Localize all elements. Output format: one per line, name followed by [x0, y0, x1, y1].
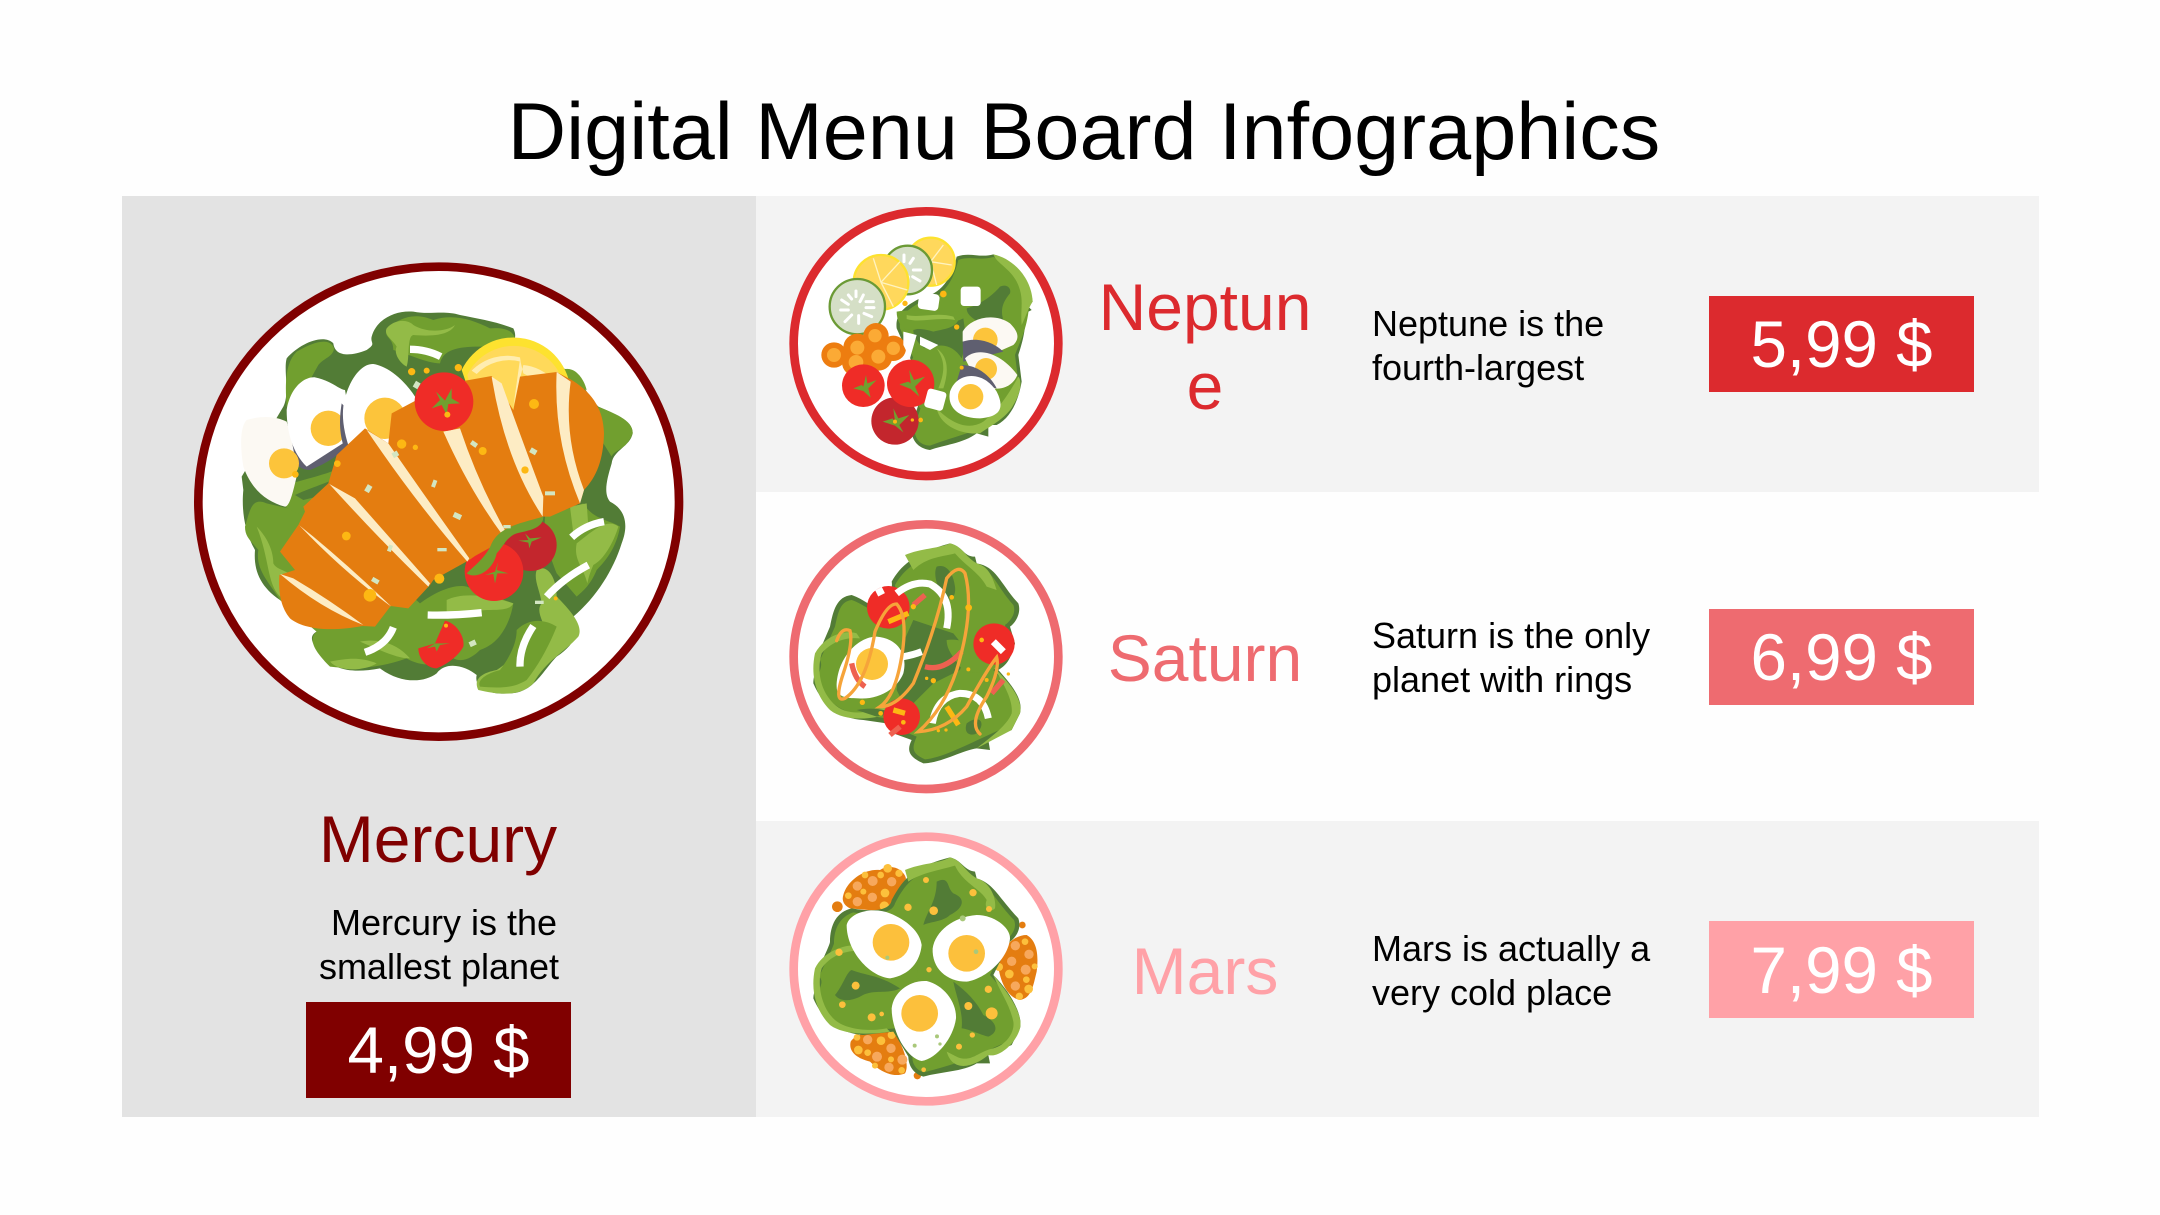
chicken slices	[279, 372, 604, 629]
title: Digital Menu Board Infographics	[508, 86, 1660, 176]
text: Mars description: Mars is actually a	[1372, 928, 1650, 969]
text: Mercury description: Mercury is the	[331, 902, 557, 943]
panel: Neptune row background	[756, 196, 2039, 492]
tomatoes	[842, 360, 934, 445]
eggs	[847, 910, 1010, 1061]
seasoning dots	[835, 877, 998, 1072]
white onion arcs	[877, 583, 1003, 723]
seasoning dots	[893, 291, 964, 424]
orange dressing squiggle	[837, 569, 997, 734]
heading: Neptune: Neptune	[1099, 270, 1311, 423]
price: Mars: 7,99 $	[1750, 934, 1933, 1007]
heading: Mercury: Mercury	[319, 802, 557, 876]
caviar clusters	[832, 864, 1038, 1079]
text: Mercury description	[319, 902, 559, 986]
price: Saturn	[1709, 609, 1974, 705]
text: Saturn description: planet with rings	[1372, 658, 1632, 700]
citrus and cucumber slices	[830, 238, 955, 334]
icon: Neptune salad plate	[789, 207, 1063, 480]
eggs and feta cubes	[903, 287, 1017, 418]
tomato on top	[415, 372, 542, 652]
price: Mercury: 4,99 $	[347, 1014, 530, 1087]
panel: Mercury featured dish	[122, 196, 756, 1117]
heading: Mars: Mars	[1132, 934, 1278, 1008]
white dressing strips	[365, 349, 604, 667]
text: Mars description	[1372, 928, 1650, 1012]
price: Mars	[1709, 921, 1974, 1018]
carrot and pepper strips	[852, 595, 1003, 735]
text: Neptune description	[1372, 303, 1604, 388]
seasoning specks	[292, 364, 558, 628]
price: Saturn: 6,99 $	[1750, 621, 1933, 694]
price: Neptune	[1709, 296, 1974, 392]
text: Mercury description: smallest planet	[319, 946, 559, 986]
egg	[837, 637, 904, 699]
tomatoes	[867, 586, 1015, 735]
text: Saturn description	[1372, 615, 1650, 700]
text: Neptune description: Neptune is the	[1372, 303, 1604, 344]
icon: Saturn salad plate	[789, 520, 1063, 794]
price: Mercury	[306, 1002, 571, 1098]
price: Neptune: 5,99 $	[1750, 308, 1933, 381]
carrots	[821, 323, 906, 376]
panel: Mars row background	[756, 821, 2039, 1117]
tomatoes under chicken	[418, 519, 557, 668]
lemon wedge	[462, 337, 571, 423]
icon: Mars salad plate	[789, 832, 1063, 1106]
icon: Mercury chicken salad plate	[194, 262, 684, 741]
lettuce	[813, 857, 1021, 1077]
text: Mars description: very cold place	[1372, 972, 1612, 1012]
eggs	[241, 364, 415, 507]
text: Saturn description: Saturn is the only	[1372, 615, 1650, 656]
seasoning dots	[860, 595, 1010, 732]
heading: Saturn: Saturn	[1108, 620, 1302, 694]
text: Neptune description: fourth-largest	[1372, 346, 1584, 388]
